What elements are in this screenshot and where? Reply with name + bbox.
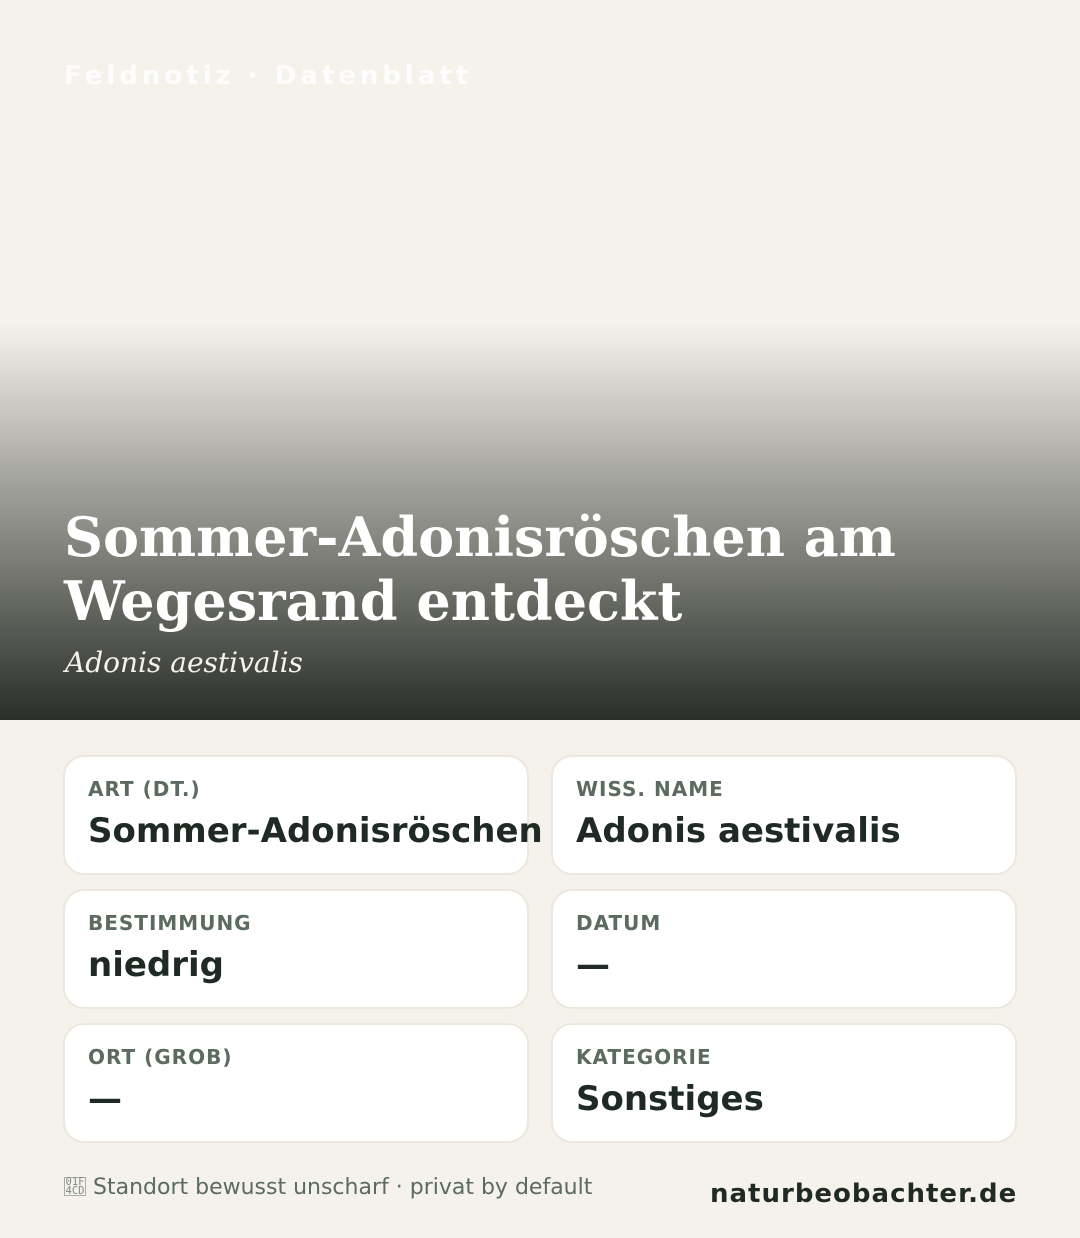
- value: —: [88, 1079, 122, 1119]
- scientific name subtitle: Adonis aestivalis: [65, 646, 303, 679]
- card: Bestimmung: [63, 889, 529, 1009]
- title: Sommer-Adonisröschen am: [64, 505, 896, 569]
- footer brand: naturbeobachter.de: [710, 1179, 1017, 1209]
- label: ART (DT.): [88, 777, 201, 801]
- label: DATUM: [576, 911, 661, 935]
- value: Sommer-Adonisröschen: [88, 811, 543, 851]
- eyebrow label: Feldnotiz · Datenblatt: [64, 61, 472, 91]
- label: KATEGORIE: [576, 1045, 712, 1069]
- title: [64, 505, 896, 633]
- value: Adonis aestivalis: [576, 811, 901, 851]
- value: Sonstiges: [576, 1079, 764, 1119]
- label: ORT (GROB): [88, 1045, 232, 1069]
- card: Kategorie: [551, 1023, 1017, 1143]
- card: wissenschaftlicher Name: [551, 755, 1017, 875]
- card: Ort: [63, 1023, 529, 1143]
- value: —: [576, 945, 610, 985]
- card: Art: [63, 755, 529, 875]
- label: WISS. NAME: [576, 777, 724, 801]
- hero panel: [0, 0, 1080, 720]
- note text: Standort bewusst unscharf · privat by default: [93, 1175, 592, 1200]
- icon: missing-glyph box: 01F 4CD: [66, 1176, 84, 1196]
- card: Datum: [551, 889, 1017, 1009]
- footer note: [64, 1175, 592, 1200]
- label: BESTIMMUNG: [88, 911, 252, 935]
- value: niedrig: [88, 945, 224, 985]
- title: Wegesrand entdeckt: [64, 569, 682, 633]
